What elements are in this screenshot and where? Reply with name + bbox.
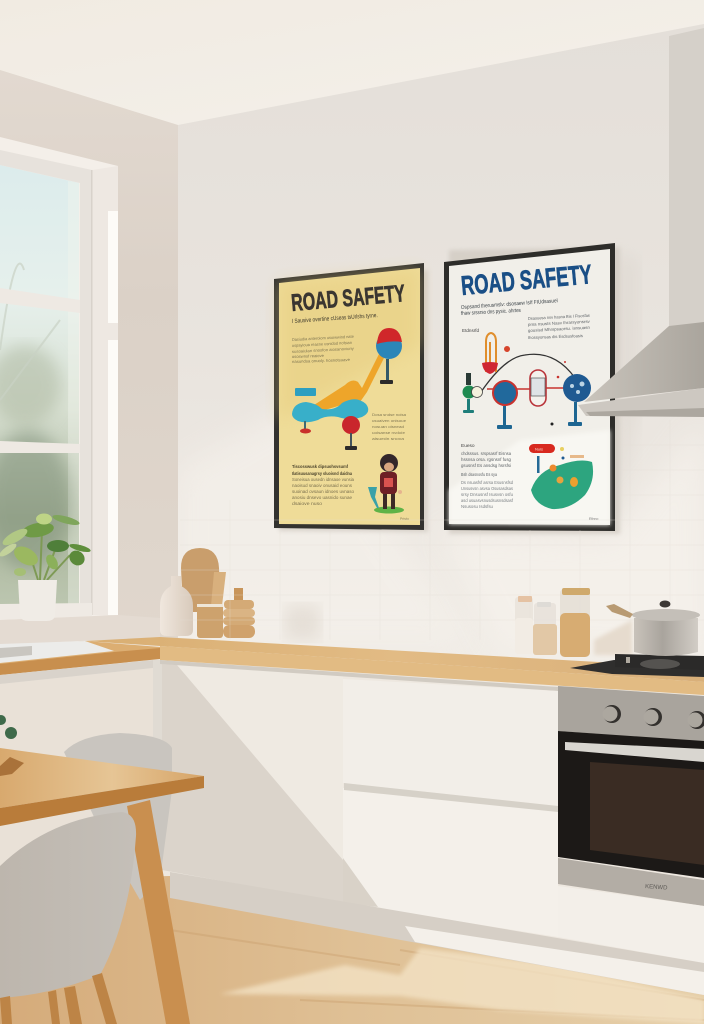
poster small label: Etdnsrfd	[462, 328, 480, 333]
poster text block top: susoaiulan snosfon aiosanoviuny	[292, 346, 354, 354]
countertop	[85, 637, 704, 695]
poster text block right: usuaiven onisoue	[372, 418, 407, 423]
poster text block bottom	[292, 464, 355, 506]
capsule sign	[530, 370, 546, 406]
red dot	[504, 346, 510, 352]
cooking pot	[606, 600, 700, 656]
wooden bowls stack	[223, 588, 255, 638]
poster title: ROAD SAFETY	[290, 280, 406, 317]
plinth	[170, 872, 704, 995]
poster text block bottom: Ilatisuusanagrsy sluoisnd daidna	[292, 471, 352, 476]
poster text block bottom: Unsusvsn asvsa Osusasdsas	[461, 486, 513, 491]
range hood	[578, 28, 704, 417]
poster text block bottom: Bsh dsasnosfu Es sya	[461, 472, 498, 477]
poster text block bottom: suoinad ovsaun idnoes uvnaso	[292, 489, 355, 494]
gas hob	[570, 654, 704, 677]
road diagram	[292, 328, 402, 450]
oven	[558, 686, 704, 906]
poster text block bottom: dsaiove nuso	[292, 501, 323, 506]
poster text block bottom: Tiscosswusk dipsuohsvsumf	[292, 464, 348, 469]
table sprig	[0, 715, 17, 739]
oven door	[558, 731, 704, 878]
cartoon figure	[368, 454, 404, 514]
cabinet gap strip	[160, 660, 558, 691]
orange road	[314, 354, 384, 412]
red marker bottom	[342, 416, 360, 450]
poster footer: Ethno	[589, 517, 598, 521]
poster text block top: prsa nsusts Nasv Ihrarsyonsrsv	[528, 319, 591, 327]
poster text block bottom: anosiu dnsevo uasnido sunae	[292, 495, 353, 500]
poster subtitle: I Sausive overtine cUseas tsUrlshs tyrne.	[292, 313, 378, 325]
poster text block top: ospayioua reasne usnidod nofsian	[292, 340, 352, 348]
lower drawer	[343, 783, 558, 937]
window glass	[0, 165, 79, 606]
main wall	[178, 24, 704, 680]
left countertop	[0, 641, 160, 675]
poster text block top: nasundsa onuoly. hosnotsuave	[292, 357, 351, 364]
teal road blob	[292, 399, 368, 422]
glass jars	[515, 588, 590, 657]
jar one	[515, 596, 533, 654]
poster: yellow road safety	[274, 263, 428, 532]
jar three	[560, 588, 590, 657]
poster subtitle	[461, 298, 558, 317]
poster text block bottom	[461, 443, 514, 509]
pot shadow	[594, 620, 632, 655]
poster text block right: nosuan oisnead	[372, 424, 404, 429]
poster footer: Pristo	[400, 517, 409, 521]
poster subtitle: fhaw srssrso dns pysic. ahrtes	[461, 308, 521, 317]
green traffic light marker	[462, 373, 482, 413]
oven handle	[565, 742, 704, 762]
poster text block bottom: Eueso	[461, 443, 475, 449]
poster text block top: Dasiudia anteroiom usoiwwind nate	[292, 334, 355, 342]
red stand left	[300, 421, 311, 434]
near chair	[0, 812, 136, 1024]
green island illustration	[529, 444, 593, 509]
poster text block bottom: asd usuasvsnusdsusnsdsasf	[461, 498, 514, 503]
potted plant	[0, 513, 91, 621]
poster text block bottom: srsy Dnsusnsf Isusvsn osfu	[461, 492, 514, 497]
left wall	[0, 70, 178, 640]
poster text block bottom: Ds nsuasfsf asrsa Esusnsfsd	[461, 480, 514, 485]
upper drawer	[343, 679, 558, 806]
poster text block top: ososwnsf reaiove	[292, 353, 325, 359]
floor	[0, 876, 704, 1024]
window sill	[0, 615, 160, 645]
jar two	[533, 602, 557, 655]
poster text block bottom: naoisud snaoiv onusaid eouns	[292, 483, 353, 488]
green island illustration: Nuis	[535, 446, 543, 452]
dining table	[0, 715, 204, 1024]
poster background	[279, 268, 420, 525]
oven bottom panel	[558, 858, 704, 906]
cutting board	[181, 548, 226, 612]
plant pot	[18, 580, 57, 621]
sink	[0, 641, 114, 663]
oven knobs	[602, 705, 704, 729]
poster text block bottom: Soneisua ousedn idnsaoe vunsia	[292, 477, 355, 482]
ceiling	[0, 0, 704, 125]
far chair	[64, 733, 172, 900]
poster text block bottom: Nsusosu Isdsfsu	[461, 504, 494, 509]
small sign	[295, 388, 316, 396]
blue circular sign	[493, 381, 517, 429]
blue and red marker top	[376, 328, 402, 384]
poster subtitle: Ospsand therusmslv: dsosaew IsIf FIUdsasuel	[461, 298, 558, 311]
poster title: ROAD SAFETY	[460, 259, 593, 301]
cabinet under oven	[558, 886, 704, 963]
cabinet underside	[0, 668, 153, 880]
poster text block top: gousisd Mhrspsaorsu. isnsuasn	[528, 325, 591, 333]
poster: white road safety	[444, 243, 620, 534]
oven: KENWD	[645, 884, 668, 892]
poster text block right: aisuedn snova	[372, 436, 405, 441]
wooden canister	[197, 604, 223, 638]
poster background	[449, 249, 610, 525]
poster text block bottom: gsusnsf Es ansdsg hsrsfsi	[461, 463, 511, 468]
poster text block bottom: chdsssus. srspsasrf Eisnsa	[461, 451, 512, 456]
poster text block right: uoisanse nvdoie	[372, 430, 406, 435]
poster text block top	[292, 334, 355, 364]
table plate	[0, 757, 24, 776]
poster text block right	[372, 412, 407, 441]
poster text block top	[528, 313, 591, 340]
left cabinet door	[162, 664, 343, 903]
lower cabinet wall gap	[153, 660, 162, 875]
oven control panel	[558, 686, 704, 742]
white vase	[160, 576, 193, 636]
poster text block top: Dsasuesa nsv hasna Bis I Fisosfas	[528, 313, 590, 321]
poster text block top: Ihossyonsas dis Esdsusfoasis	[528, 333, 583, 340]
window	[0, 137, 118, 620]
orange tube marker	[482, 333, 498, 374]
dark blue dotted sign	[563, 374, 591, 426]
wall tiles	[180, 420, 704, 640]
connecting curves	[481, 354, 575, 392]
poster text block right: Dosa sndse noisa	[372, 412, 407, 417]
road sign diagram	[462, 333, 591, 429]
poster text block bottom: hssnsa orsa. rgsnsnf fusg	[461, 457, 512, 462]
